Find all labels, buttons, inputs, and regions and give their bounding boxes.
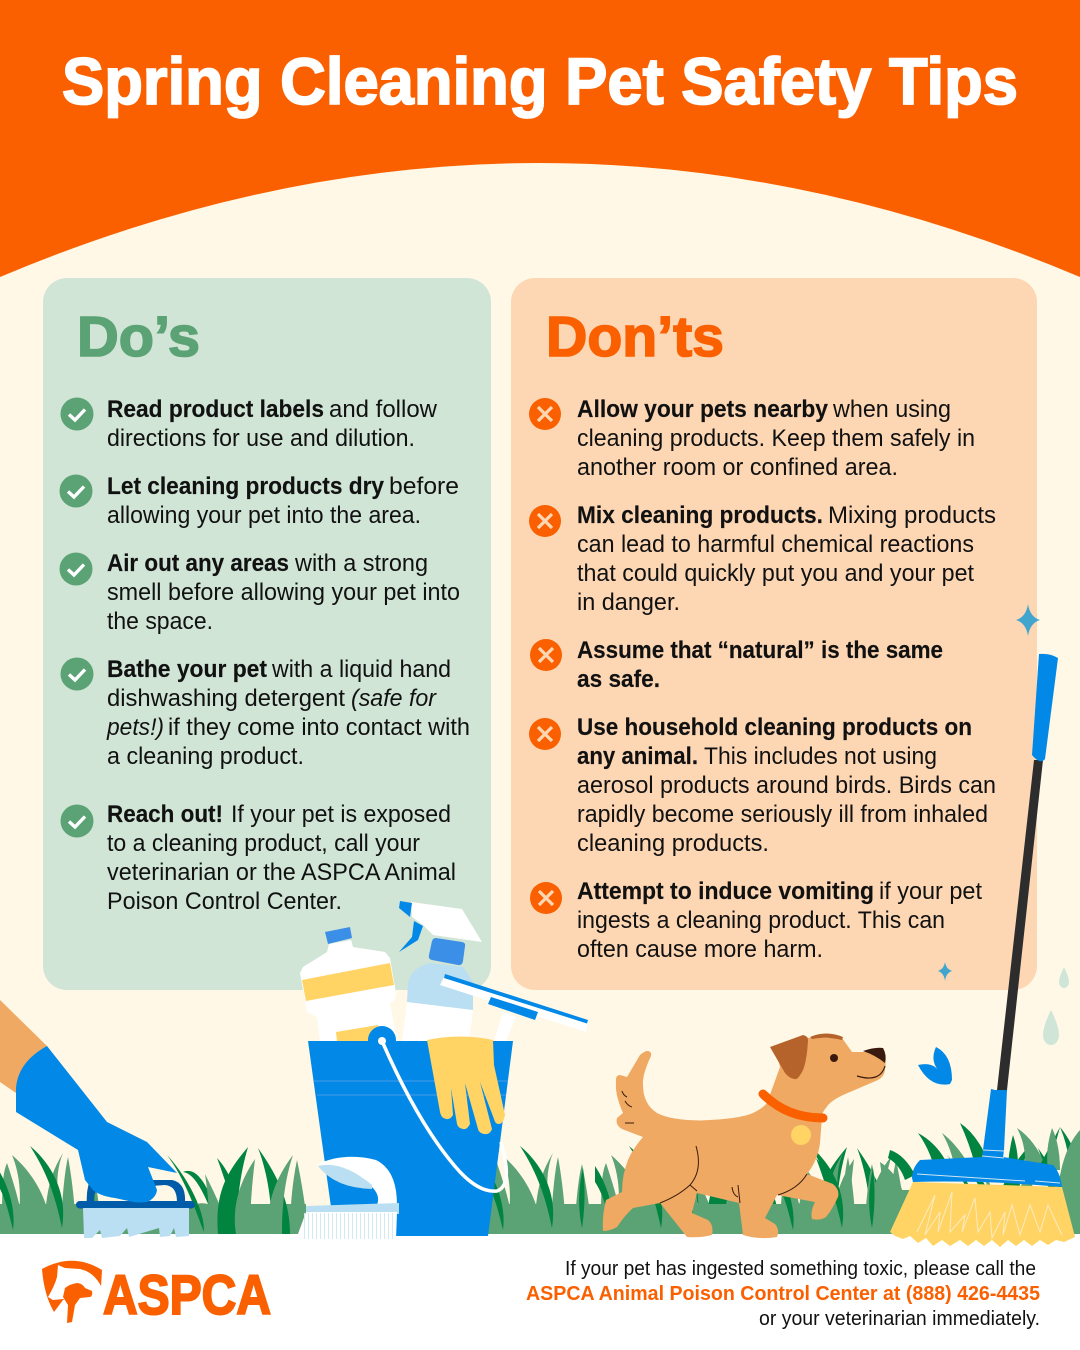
don't: mix products: in danger.	[577, 589, 680, 616]
tip: bathe your pet: Bathe your pet	[107, 656, 267, 683]
tip: bathe your pet: a cleaning product.	[107, 743, 304, 770]
don't: use on animals: cleaning products.	[577, 830, 769, 857]
tip: bathe your pet: pets!)	[106, 714, 164, 741]
don't: mix products	[529, 502, 996, 616]
tip: reach out: If your pet is exposed	[231, 801, 451, 828]
tip: let products dry: Let cleaning products dry	[107, 473, 384, 500]
don't: mix products: that could quickly put you and your pet	[577, 560, 974, 587]
icon: dog	[603, 1034, 886, 1238]
tip: bathe your pet: dishwashing detergent	[107, 685, 345, 712]
don't: mix products: Mixing products	[828, 502, 996, 529]
don't: use on animals: any animal.	[577, 743, 698, 770]
icon: front scrub brush	[298, 1157, 399, 1243]
don't: natural is safe: as safe.	[577, 666, 660, 693]
footer message	[526, 1258, 1040, 1330]
don't: induce vomiting: Attempt to induce vomiting	[577, 878, 874, 905]
tip: bathe your pet: with a liquid hand	[271, 656, 451, 683]
don't: allow pets nearby: another room or confined area.	[577, 454, 898, 481]
water drop large	[1043, 1010, 1059, 1045]
tip: reach out: to a cleaning product, call your	[107, 830, 420, 857]
icon: bucket	[308, 1026, 513, 1236]
icon: blue leaf	[918, 1047, 952, 1085]
tip: air out areas: Air out any areas	[107, 550, 289, 577]
logo wordmark: ASPCA	[103, 1263, 271, 1326]
don't: use on animals	[529, 714, 996, 857]
don't: mix products: Mix cleaning products.	[577, 502, 823, 529]
don't: use on animals: aerosol products around birds. Birds can	[577, 772, 996, 799]
don't: use on animals: This includes not using	[704, 743, 937, 770]
tip: let products dry	[60, 473, 459, 529]
don't: allow pets nearby	[529, 396, 975, 481]
panel: do's	[43, 278, 491, 990]
tip: read labels: and follow	[329, 396, 437, 423]
bucket handle	[382, 1041, 506, 1191]
tip: reach out: Reach out!	[107, 801, 223, 828]
tip: reach out: Poison Control Center.	[107, 888, 342, 915]
tip: read labels: Read product labels	[107, 396, 324, 423]
tip: bathe your pet	[60, 656, 470, 770]
don't: use on animals: rapidly become seriously ill from inhaled	[577, 801, 988, 828]
footer message: or your veterinarian immediately.	[759, 1308, 1040, 1330]
logo shield	[42, 1261, 102, 1312]
grass strip	[0, 1123, 1080, 1234]
icon: white bottle	[300, 927, 397, 1041]
tip: bathe your pet: if they come into contact with	[168, 714, 470, 741]
icon: spray bottle	[399, 901, 482, 1041]
tip: air out areas: the space.	[107, 608, 213, 635]
tip: reach out	[60, 801, 456, 915]
don't: natural is safe: Assume that “natural” is the same	[577, 637, 943, 664]
heading: don'ts: Don’ts	[546, 305, 724, 369]
icon: yellow glove	[427, 1036, 505, 1134]
footer band	[0, 1234, 1080, 1350]
sparkle small	[938, 962, 952, 981]
don't: natural is safe	[530, 637, 943, 693]
water drop small	[1059, 967, 1069, 988]
title: Spring Cleaning Pet Safety Tips	[62, 44, 1018, 118]
footer message: If your pet has ingested something toxic, please call the	[565, 1258, 1036, 1280]
don't: allow pets nearby: when using	[832, 396, 951, 423]
tip: read labels: directions for use and dilution.	[107, 425, 415, 452]
don't: mix products: can lead to harmful chemical reactions	[577, 531, 974, 558]
don't: allow pets nearby: cleaning products. Keep them safely in	[577, 425, 975, 452]
panel: don'ts	[511, 278, 1037, 990]
tip: bathe your pet: (safe for	[351, 685, 437, 712]
don't: allow pets nearby: Allow your pets nearby	[577, 396, 828, 423]
icon: arm and glove with scrub brush	[0, 1000, 195, 1238]
sparkle large	[1016, 604, 1040, 636]
tip: let products dry: allowing your pet into the area.	[107, 502, 421, 529]
tip: air out areas: with a strong	[294, 550, 428, 577]
heading: do's: Do’s	[77, 305, 200, 369]
tip: air out areas: smell before allowing your pet into	[107, 579, 460, 606]
header orange arc	[0, 0, 1080, 277]
icon: squeegee	[440, 974, 588, 1041]
tip: let products dry: before	[389, 473, 459, 500]
footer message: ASPCA Animal Poison Control Center at (888) 426-4435	[526, 1283, 1040, 1305]
tip: air out areas	[60, 550, 460, 635]
don't: induce vomiting: ingests a cleaning product. This can	[577, 907, 945, 934]
don't: induce vomiting: often cause more harm.	[577, 936, 823, 963]
tip: reach out: veterinarian or the ASPCA Animal	[107, 859, 456, 886]
don't: induce vomiting: if your pet	[879, 878, 982, 905]
icon: broom	[890, 654, 1075, 1247]
don't: use on animals: Use household cleaning products on	[577, 714, 972, 741]
tip: read labels	[60, 396, 437, 452]
don't: induce vomiting	[530, 878, 982, 963]
logo: ASPCA	[42, 1261, 271, 1326]
